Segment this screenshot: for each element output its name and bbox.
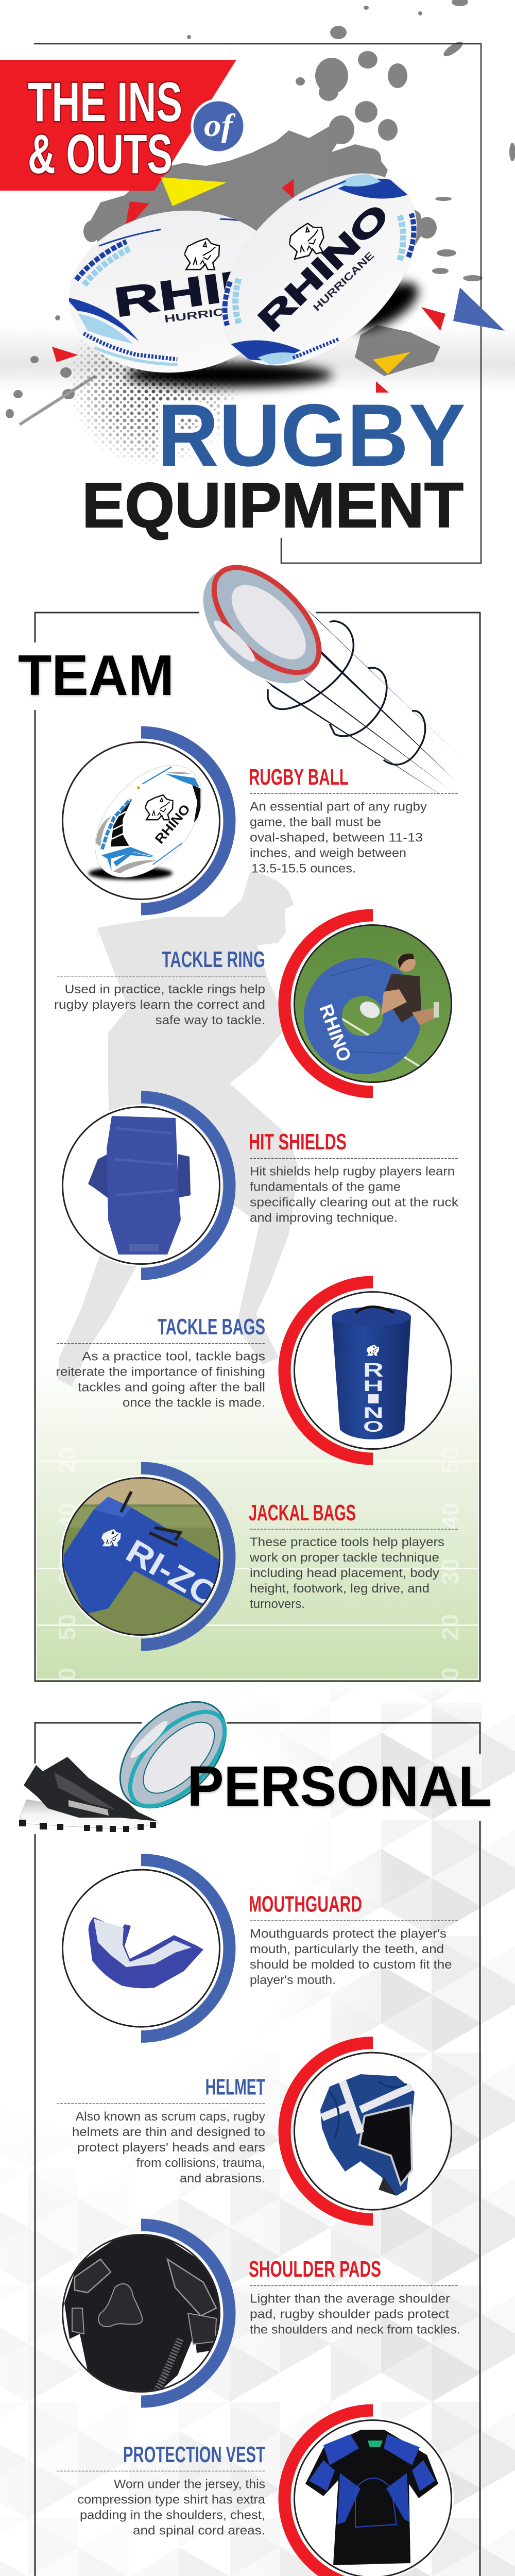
wordmark on right ball: RHINO	[251, 197, 396, 338]
body text: padding in the shoulders, chest,	[80, 2508, 265, 2522]
heading: team: TEAM	[18, 643, 174, 707]
yard numbers	[54, 1447, 464, 1681]
title: RUGBY BALL	[249, 765, 349, 790]
body text: These practice tools help players	[250, 1535, 444, 1549]
dashed divider	[57, 2103, 265, 2104]
title: rugby: RUGBY	[157, 386, 466, 485]
frame	[35, 1723, 480, 2576]
item: rugby ball	[63, 726, 458, 915]
body text: rugby players learn the correct and	[54, 998, 265, 1012]
photo circle	[63, 742, 219, 900]
yard numbers: 0	[437, 1667, 464, 1681]
circle outline	[63, 2235, 219, 2392]
circle outline	[63, 1478, 219, 1635]
red triangle behind right ball	[282, 179, 294, 199]
yard numbers: 40	[54, 1503, 80, 1529]
body text	[250, 1164, 459, 1225]
model name on left ball: HURRICANE	[164, 302, 257, 325]
heading: personal: PERSONAL	[187, 1755, 492, 1818]
photo circle	[295, 2053, 451, 2210]
tackle bag photo: H	[363, 1378, 384, 1395]
body text: and abrasions.	[180, 2172, 265, 2185]
panel: team	[18, 546, 480, 1681]
yard numbers: 30	[54, 1558, 80, 1585]
yard numbers: 20	[54, 1447, 80, 1473]
title: SHOULDER PADS	[249, 2257, 381, 2282]
body text	[56, 1350, 265, 1410]
jackal bag photo	[63, 1479, 219, 1634]
item: mouthguard	[63, 1854, 458, 2043]
body text: including head placement, body	[250, 1566, 439, 1580]
title: equipment: EQUIPMENT	[82, 470, 464, 541]
body text	[250, 1927, 452, 1987]
circle outline	[63, 1107, 219, 1264]
background clear area upper left	[0, 1684, 397, 2215]
mouthguard photo	[89, 1917, 203, 1988]
badge: of: of	[204, 108, 236, 143]
body text: player's mouth.	[250, 1973, 336, 1987]
blue triangle	[453, 287, 505, 331]
photo circle	[292, 2418, 454, 2576]
body text: An essential part of any rugby	[250, 800, 427, 814]
body text	[77, 2477, 266, 2537]
left rugby ball	[69, 210, 256, 373]
body text: should be molded to custom fit the	[250, 1958, 452, 1972]
ring	[141, 2218, 235, 2408]
photo circle	[295, 1292, 451, 1449]
body text: oval-shaped, between 11-13	[250, 831, 423, 845]
yard numbers: 40	[437, 1503, 464, 1529]
body text: height, footwork, leg drive, and	[250, 1582, 430, 1596]
photo circle	[60, 1476, 222, 1637]
yard numbers: 30	[437, 1558, 464, 1585]
ball shadow	[127, 363, 333, 387]
photo circle	[60, 2232, 222, 2394]
item: shoulder pads	[60, 2218, 460, 2408]
hit shield photo	[88, 1116, 191, 1255]
body text	[72, 2110, 265, 2185]
ring	[141, 1091, 235, 1280]
dashed divider	[250, 1158, 458, 1159]
field backdrop	[37, 1360, 478, 1681]
red triangle left of balls	[125, 201, 149, 231]
logo on left ball	[184, 239, 219, 269]
dashed divider	[250, 2285, 458, 2286]
ring	[278, 1276, 373, 1465]
body text: and spinal cord areas.	[133, 2523, 265, 2537]
red banner	[0, 60, 236, 191]
body text: protect players' heads and ears	[77, 2141, 265, 2155]
photo circle	[292, 923, 454, 1084]
title: the ins and outs: & OUTS	[28, 123, 173, 185]
body text: inches, and weigh between	[250, 846, 406, 860]
title: HIT SHIELDS	[249, 1129, 347, 1155]
body text: compression type shirt has extra	[77, 2493, 266, 2506]
title: JACKAL BAGS	[249, 1500, 356, 1526]
title: HELMET	[205, 2074, 265, 2100]
item: protection vest	[57, 2404, 454, 2576]
right ball shadow	[342, 273, 425, 340]
player silhouette	[58, 872, 299, 1386]
body text	[250, 2292, 460, 2337]
title: PROTECTION VEST	[123, 2442, 265, 2467]
body text: Mouthguards protect the player's	[250, 1927, 447, 1941]
panel: personal	[0, 1682, 515, 2576]
title: the ins and outs	[28, 71, 182, 185]
red triangle right	[421, 307, 445, 331]
body text: 13.5-15.5 ounces.	[251, 861, 356, 876]
helmet photo	[320, 2074, 415, 2196]
body text: game, the ball must be	[250, 815, 381, 829]
body text: specifically clearing out at the ruck	[250, 1195, 459, 1210]
body text: Lighter than the average shoulder	[250, 2292, 450, 2306]
ring	[141, 1854, 235, 2043]
body text: tackles and going after the ball	[78, 1381, 265, 1395]
dashed divider	[250, 793, 458, 794]
body text: helmets are thin and designed to	[72, 2125, 265, 2139]
triangle background	[0, 1683, 515, 2576]
photo circle	[60, 1105, 222, 1266]
yard numbers: 0	[54, 1667, 80, 1681]
body text: pad, rugby shoulder pads protect	[250, 2307, 449, 2321]
item: jackal bags	[57, 1462, 458, 1651]
item: tackle ring	[54, 909, 454, 1098]
dashed divider	[250, 1920, 458, 1921]
body text	[250, 800, 427, 876]
body text: fundamentals of the game	[250, 1180, 401, 1194]
tackle bag photo	[332, 1307, 411, 1439]
protection vest photo	[305, 2430, 438, 2565]
circle outline	[295, 925, 451, 1082]
body text: from collisions, trauma,	[136, 2156, 265, 2170]
title: MOUTHGUARD	[249, 1892, 362, 1917]
yellow triangle	[161, 177, 227, 206]
right rugby ball	[221, 173, 417, 366]
speed lines	[265, 607, 466, 802]
photo circle	[63, 1870, 219, 2027]
title: the ins and outs: THE INS	[28, 71, 182, 133]
body text: once the tackle is made.	[123, 1396, 265, 1410]
body text: turnovers.	[250, 1597, 305, 1611]
field lines	[37, 1461, 478, 1680]
red triangle under title	[376, 381, 389, 393]
ring	[141, 1462, 235, 1651]
body text	[54, 982, 265, 1027]
body text: the shoulders and neck from tackles.	[250, 2323, 460, 2337]
shoulder pads photo	[64, 2233, 222, 2396]
tackle ring photo: RHINO	[315, 1002, 355, 1064]
item: hit shields	[60, 1091, 459, 1280]
body text: safe way to tackle.	[156, 1013, 265, 1027]
item: helmet	[57, 2037, 451, 2226]
rugby ball photo	[86, 765, 202, 883]
body text	[249, 1535, 444, 1611]
tackle bag photo: R	[363, 1360, 384, 1381]
gold triangle	[373, 352, 410, 374]
model name on right ball: HURRICANE	[311, 250, 376, 314]
yard numbers: 50	[54, 1614, 80, 1640]
rugby ball photo: RHINO	[152, 802, 193, 846]
header frame	[34, 44, 481, 563]
body text: reiterate the importance of finishing	[56, 1365, 265, 1379]
ring	[278, 2404, 373, 2576]
title: TACKLE BAGS	[158, 1314, 265, 1340]
tackle bag photo: O	[363, 1418, 384, 1435]
body text: work on proper tackle technique	[249, 1551, 439, 1565]
header panel	[0, 0, 515, 563]
frame	[35, 613, 480, 1681]
body text: Hit shields help rugby players learn	[250, 1164, 455, 1179]
dashed divider	[250, 1529, 458, 1530]
body text: Also known as scrum caps, rugby	[76, 2110, 265, 2124]
soft shadow band	[0, 325, 515, 392]
yard numbers: 20	[437, 1614, 464, 1640]
tackle ring photo	[294, 922, 453, 1087]
jackal bag photo: RI-ZO	[120, 1532, 226, 1615]
logo on right ball	[285, 221, 328, 260]
red triangle lower left	[52, 347, 78, 362]
ring	[278, 2037, 373, 2226]
icon: teal ball	[100, 1682, 246, 1827]
body text: As a practice tool, tackle bags	[82, 1350, 265, 1364]
body text: mouth, particularly the teeth, and	[250, 1942, 444, 1956]
ink splatter	[6, 0, 515, 425]
dashed divider	[57, 2470, 265, 2471]
tackle bag photo: I	[363, 1391, 384, 1406]
tackle bag photo: N	[363, 1404, 384, 1421]
ring	[141, 726, 235, 915]
dashed divider	[57, 1343, 265, 1344]
body text: Used in practice, tackle rings help	[65, 982, 265, 996]
item: tackle bags	[56, 1276, 451, 1465]
yard numbers: 50	[437, 1447, 464, 1473]
icon: flying red ball	[181, 546, 466, 802]
circle outline	[295, 2420, 451, 2576]
ring	[278, 909, 373, 1098]
icon: boot	[19, 1757, 158, 1832]
body text: Worn under the jersey, this	[114, 2477, 265, 2491]
dashed divider	[57, 976, 265, 977]
body text: and improving technique.	[250, 1211, 398, 1225]
wordmark on left ball: RHINO	[111, 252, 317, 326]
background top fade	[0, 1683, 515, 1719]
badge: of	[192, 100, 245, 152]
halftone dots	[70, 340, 237, 464]
title: TACKLE RING	[162, 947, 265, 972]
